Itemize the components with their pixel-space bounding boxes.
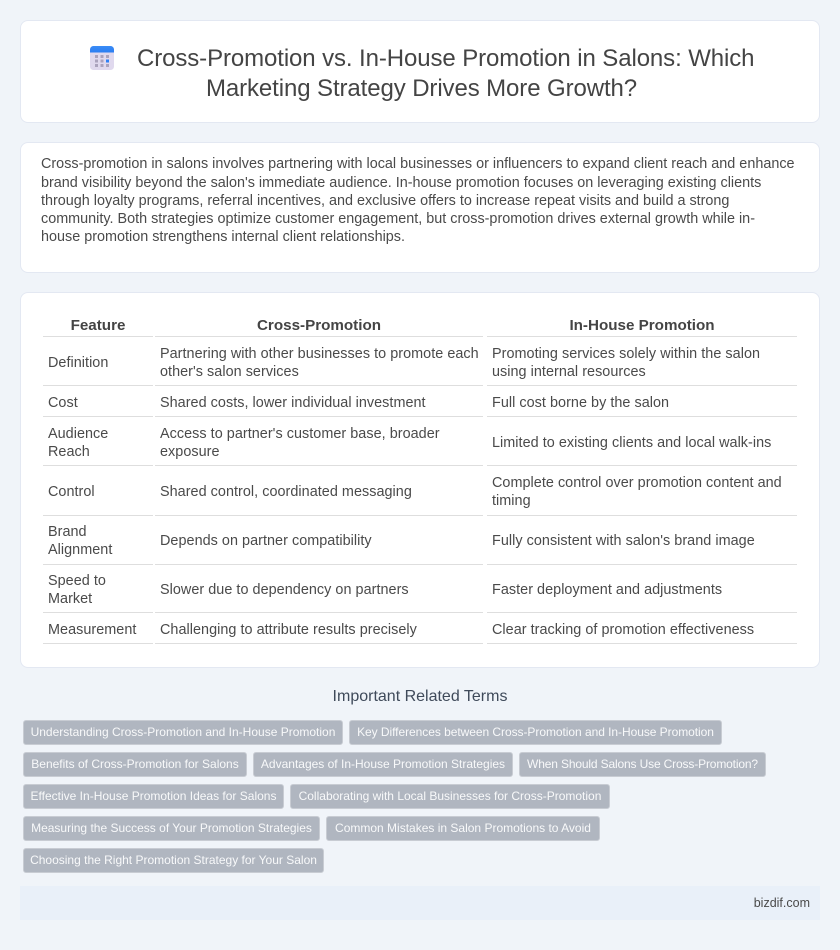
icon: calendar [90, 46, 114, 70]
text block: description: through loyalty programs, referral incentives, and exclusive offers to increase repeat visits and build a strong [41, 193, 729, 209]
row: Control: Shared control, coordinated messaging [160, 484, 412, 500]
panel: description [20, 142, 820, 273]
tag list: related terms: Choosing the Right Promotion Strategy for Your Salon [30, 853, 317, 867]
row: Brand Alignment [48, 524, 755, 558]
tag list: related terms: Collaborating with Local Businesses for Cross-Promotion [299, 789, 601, 803]
row: Definition: other's salon services [160, 364, 299, 380]
tag list: related terms: Benefits of Cross-Promotion for Salons [31, 757, 239, 771]
row: Measurement: Challenging to attribute results precisely [160, 622, 417, 638]
row: Brand Alignment: Brand [48, 524, 87, 540]
row: Audience Reach: Reach [48, 444, 90, 460]
tag list: related terms: When Should Salons Use Cross-Promotion? [527, 757, 758, 771]
row: Brand Alignment: Fully consistent with salon's brand image [492, 533, 755, 549]
tag list: related terms: Effective In-House Promotion Ideas for Salons [31, 789, 276, 803]
row: Measurement: Measurement [48, 622, 136, 638]
text block: description [41, 156, 795, 245]
row: Audience Reach: Audience [48, 426, 108, 442]
tag list: related terms: Common Mistakes in Salon Promotions to Avoid [335, 821, 591, 835]
row: Definition [48, 346, 760, 380]
tag list: related terms [23, 720, 766, 873]
title [137, 45, 754, 102]
row: Cost: Cost [48, 395, 78, 411]
tag list: related terms: Measuring the Success of Your Promotion Strategies [31, 821, 312, 835]
row: Speed to Market: Speed to [48, 573, 106, 589]
row: Definition: using internal resources [492, 364, 646, 380]
row: Control [48, 475, 782, 509]
footer bar [20, 886, 820, 920]
text block: description: community. Both strategies optimize customer engagement, but cross-promotion drives external growth while in- [41, 211, 755, 227]
row: Measurement [48, 622, 754, 638]
footer text: bizdif.com: bizdif.com [754, 896, 810, 910]
text block: description: brand visibility beyond the salon's immediate audience. In-house promotion focuses on leveraging existing clients [41, 174, 761, 190]
row: Brand Alignment: Alignment [48, 542, 112, 558]
table header: In-House Promotion: In-House Promotion [569, 317, 715, 334]
panel: comparison table [20, 292, 820, 668]
row: Cost [48, 395, 669, 411]
text block: description: house promotion strengthens internal client relationships. [41, 229, 405, 245]
tag list: related terms: Understanding Cross-Promotion and In-House Promotion [31, 725, 335, 739]
row: Definition: Partnering with other businesses to promote each [160, 346, 479, 362]
row: Audience Reach [48, 426, 771, 460]
row: Speed to Market: Market [48, 591, 92, 607]
row: Cost: Shared costs, lower individual investment [160, 395, 426, 411]
row: Measurement: Clear tracking of promotion effectiveness [492, 622, 754, 638]
row: Speed to Market [48, 573, 722, 607]
heading: Important Related Terms: Important Related Terms [333, 688, 507, 705]
row: Speed to Market: Faster deployment and adjustments [492, 582, 722, 598]
row: Cost: Full cost borne by the salon [492, 395, 669, 411]
row: Control: Complete control over promotion content and [492, 475, 782, 491]
table header: Feature: Feature [71, 317, 125, 334]
tag list: related terms: Key Differences between Cross-Promotion and In-House Promotion [357, 725, 714, 739]
row: Audience Reach: exposure [160, 444, 220, 460]
row: Speed to Market: Slower due to dependency on partners [160, 582, 409, 598]
panel: title header [20, 20, 820, 123]
row: Audience Reach: Limited to existing clients and local walk-ins [492, 435, 771, 451]
row: Audience Reach: Access to partner's customer base, broader [160, 426, 440, 442]
row: Control: Control [48, 484, 95, 500]
row: Control: timing [492, 493, 531, 509]
title: Marketing Strategy Drives More Growth? [206, 75, 637, 102]
row: Brand Alignment: Depends on partner compatibility [160, 533, 372, 549]
text block: description: Cross-promotion in salons involves partnering with local businesses or influencers to expand client reach and enhance [41, 156, 795, 172]
row: Definition: Promoting services solely within the salon [492, 346, 760, 362]
table header: Cross-Promotion: Cross-Promotion [257, 317, 381, 334]
row: Definition: Definition [48, 355, 108, 371]
title: Cross-Promotion vs. In-House Promotion in Salons: Which [137, 45, 754, 72]
tag list: related terms: Advantages of In-House Promotion Strategies [261, 757, 505, 771]
